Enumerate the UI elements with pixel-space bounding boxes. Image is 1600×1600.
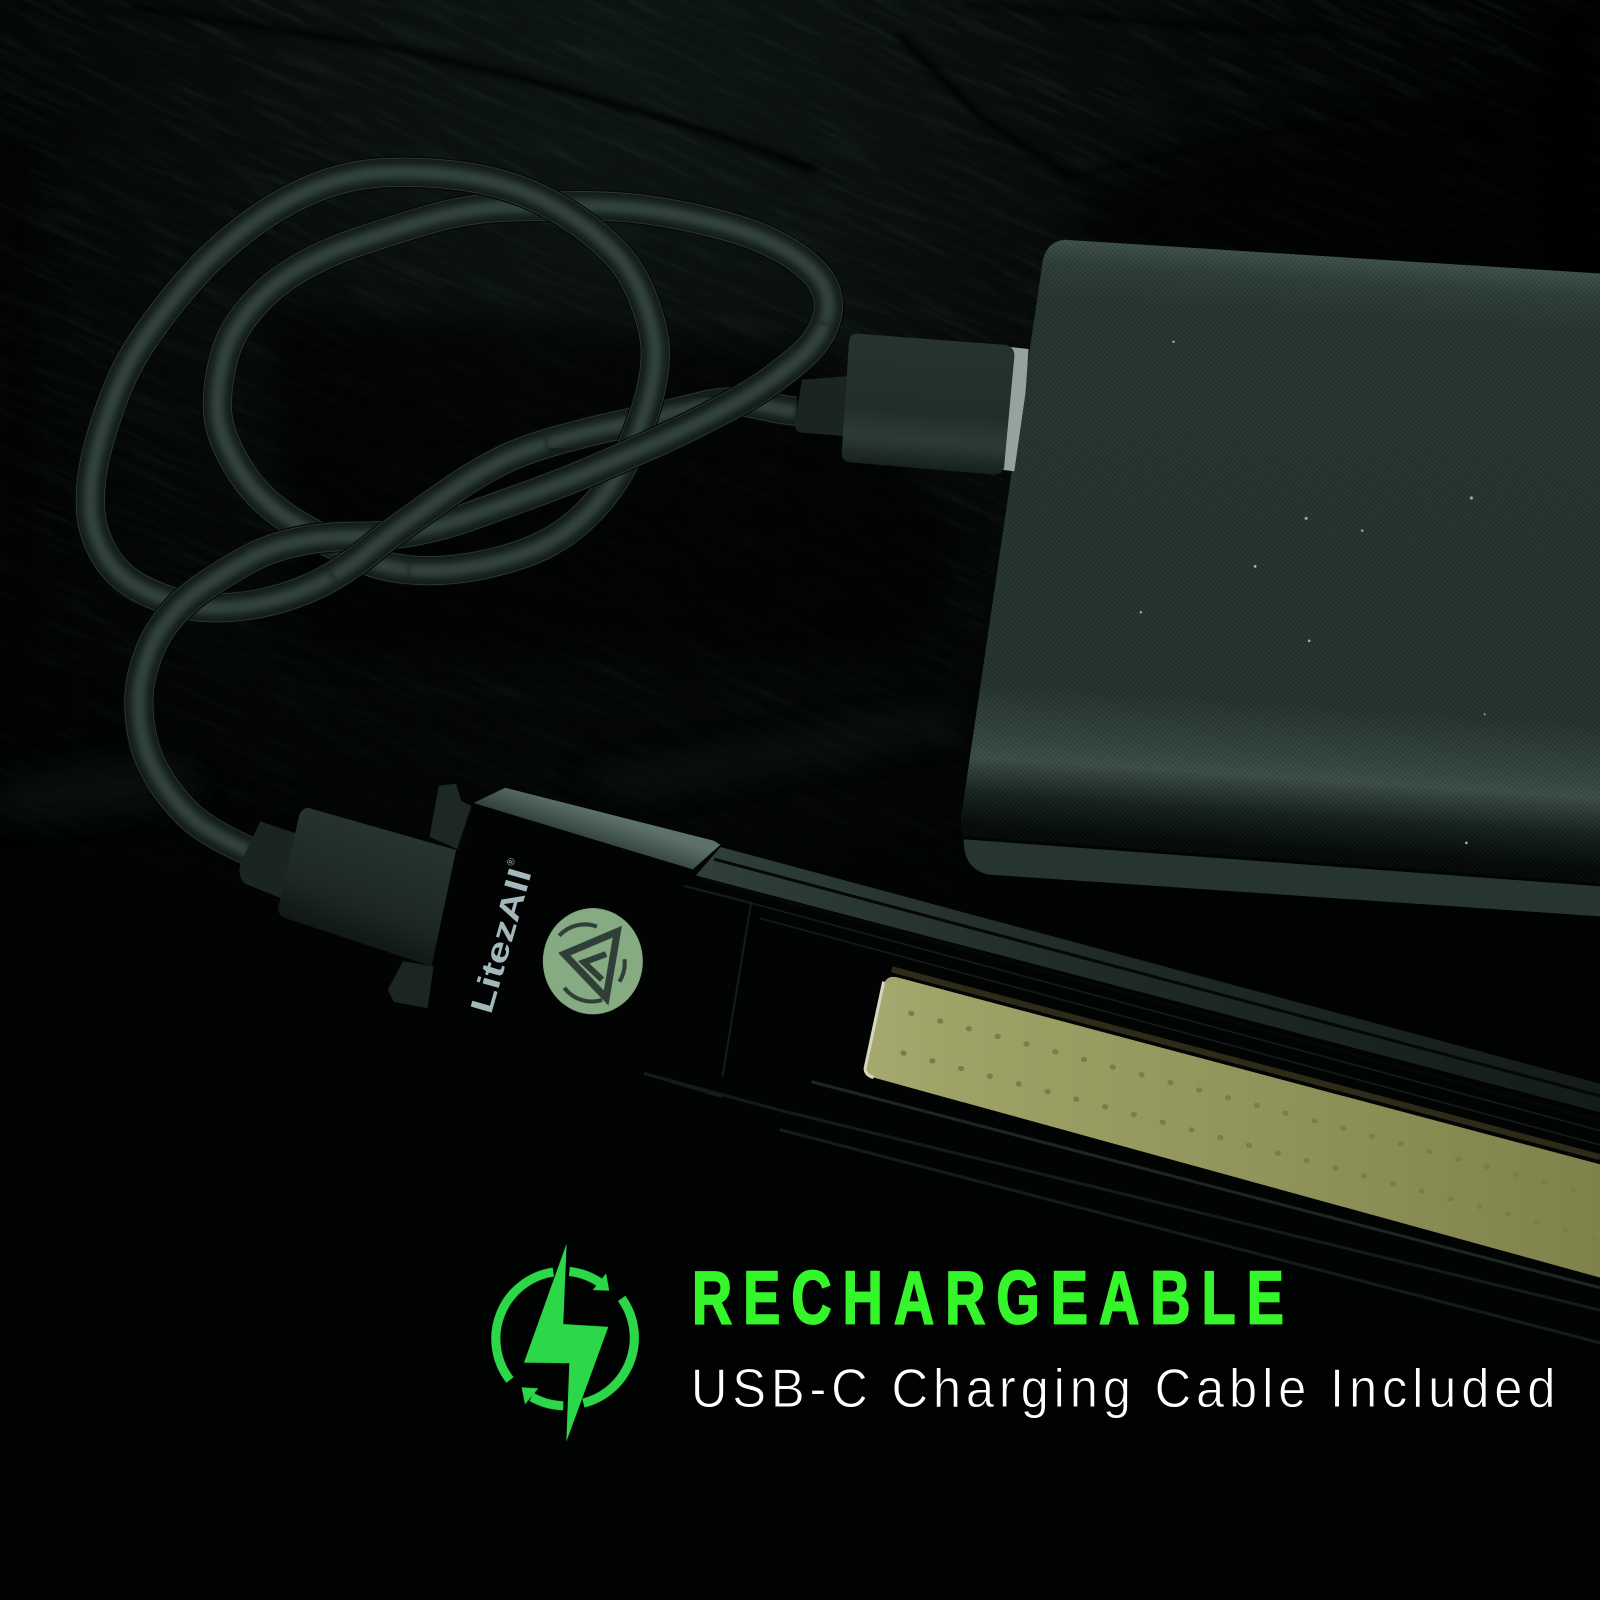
power bank leather texture [961,240,1600,884]
lens frame lower [811,1082,1600,1288]
title: RECHARGEABLE [692,1256,1284,1341]
cable crossing on top [332,443,547,577]
outer cable loop [90,172,655,608]
LED dots row two [903,1053,1600,1239]
rock cracks [133,3,1480,177]
cable run to light [139,323,825,851]
power bank seam [963,838,1600,885]
metal plug [1000,347,1029,471]
bar body [425,788,1600,1347]
power button with logo [543,908,643,1014]
strain relief [795,376,857,437]
USB-C strain relief [239,821,306,898]
dark rock background [0,0,1528,820]
rail thin lines [751,903,1600,1145]
inner cable loop [217,206,828,570]
power bank [961,240,1600,916]
subtitle: USB-C Charging Cable Included [691,1358,1555,1420]
brand wordmark: ® [506,856,518,867]
side clips [430,784,471,849]
top rail [696,847,1600,1112]
lightning bolt [524,1243,608,1442]
USB-A connector [795,334,1029,475]
LED panel left rim [865,982,884,1078]
rail grooves [704,859,1600,1120]
cable run behind loop [547,402,796,443]
icon: recharge bolt [496,1243,634,1442]
faint rock ridges [0,704,959,827]
lens frame upper line [892,969,1600,1157]
head top cap [473,788,720,869]
USB-C body [278,808,456,966]
power bank lower shell [961,816,1600,916]
arrowheads [593,1273,609,1291]
COB LED panel [865,977,1600,1278]
charging cable [90,172,828,851]
bottom rails [644,1073,1600,1343]
shadowed rock faces [0,0,1600,714]
fine brush streaks [4,0,1523,405]
brand wordmark [463,856,539,1017]
recycle ring arcs [496,1271,634,1406]
power bank upper shell [961,240,1600,884]
connector body [842,334,1014,475]
dust specks [1140,341,1486,844]
brand wordmark: LitezAll [463,864,539,1017]
LED dots row one [911,1013,1600,1197]
head face seams [644,886,751,1097]
light bar [239,784,1600,1347]
